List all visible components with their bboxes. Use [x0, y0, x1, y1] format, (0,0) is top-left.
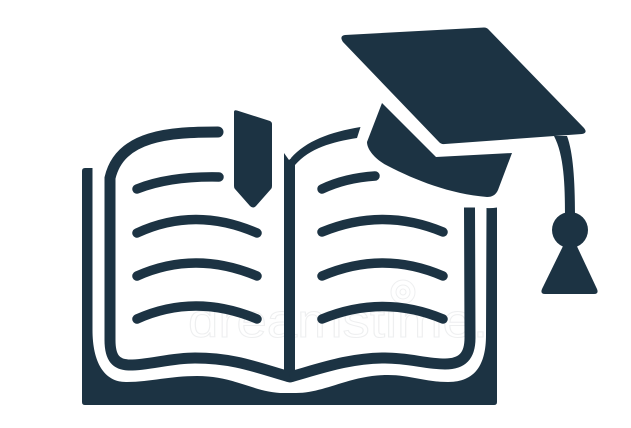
right page top edge — [291, 127, 360, 165]
cap board — [341, 28, 586, 144]
book spine — [284, 153, 295, 378]
book back cover — [82, 168, 497, 405]
left page outline — [110, 132, 290, 377]
text lines: right page — [322, 176, 443, 319]
graduation cap — [341, 28, 598, 294]
right page outline — [290, 208, 470, 377]
cap base — [367, 103, 512, 197]
tassel knot — [552, 212, 588, 248]
book: covers, pages and text lines — [82, 110, 497, 405]
tassel cord — [554, 136, 575, 215]
text lines: left page — [137, 177, 257, 319]
watermark — [188, 280, 488, 347]
tassel fringe — [541, 240, 598, 294]
watermark logo — [391, 280, 415, 304]
bookmark — [234, 110, 272, 208]
watermark text: dreamstime. — [188, 294, 488, 347]
